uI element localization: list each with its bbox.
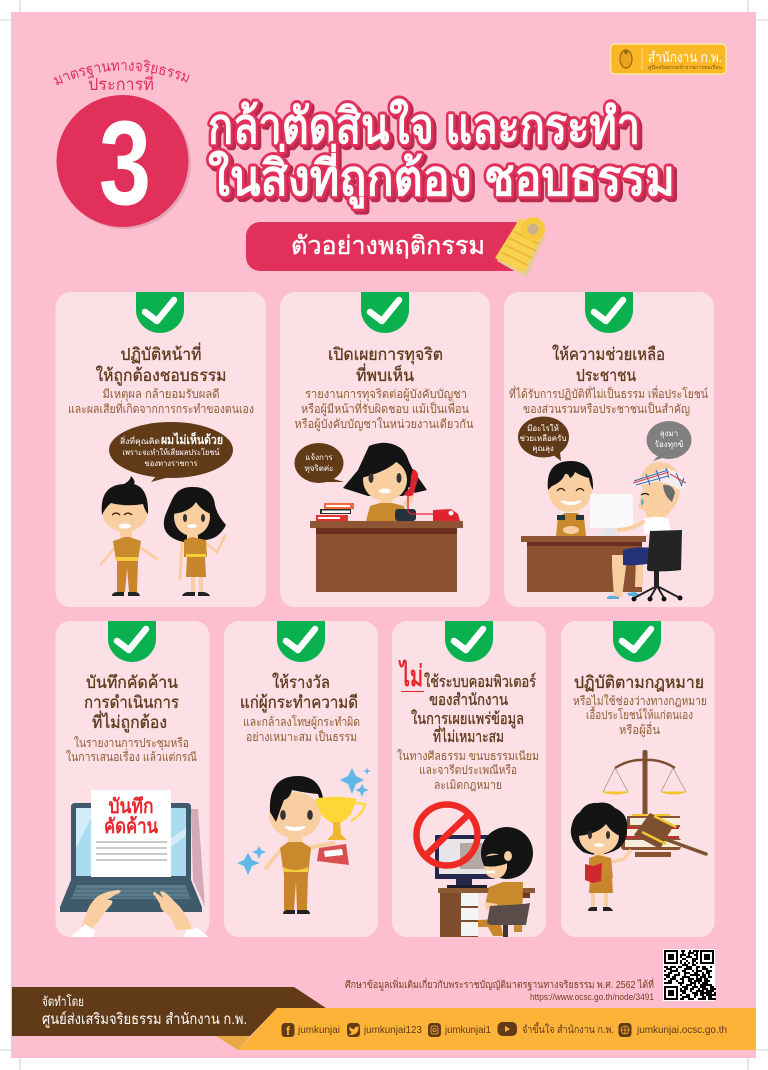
title: ในสิ่งที่ถูกต้อง ชอบธรรม	[211, 146, 678, 212]
icon: prohibition sign	[416, 804, 478, 866]
icon: check shield	[585, 292, 633, 333]
description: หรือผู้มีหน้าที่รับผิดชอบ แม้เป็นเพื่อน	[301, 400, 469, 417]
illustration: officer helping citizen at desk	[521, 461, 688, 602]
speech bubble	[109, 422, 233, 482]
description	[573, 694, 707, 738]
description: ในทางศีลธรรม ขนบธรรมเนียม	[397, 749, 539, 763]
speech bubble: เพราะจะทำให้เสียผลประโยชน์	[122, 447, 220, 457]
description: ของส่วนรวมหรือประชาชนเป็นสำคัญ	[523, 401, 690, 416]
illustration: laptop with memo: บันทึก	[108, 796, 154, 818]
panel: perform duties	[56, 292, 266, 607]
icon: check shield	[108, 621, 156, 662]
heading: ในการเผยแพร่ข้อมูล	[411, 709, 524, 729]
description: หรือผู้บังคับบัญชาในหน่วยงานเดียวกัน	[294, 417, 474, 432]
subtitle pill: ตัวอย่างพฤติกรรม	[291, 232, 485, 260]
description	[509, 385, 708, 416]
description: ในรายงานการประชุมหรือ	[74, 736, 189, 751]
illustration: books and gavel	[621, 813, 706, 857]
heading: ให้ความช่วยเหลือ	[552, 344, 665, 364]
icon: sparkles	[237, 768, 371, 875]
panel: disclose corruption	[280, 292, 490, 607]
speech bubble: ผมไม่เห็นด้วย	[161, 432, 223, 447]
heading: ให้ถูกต้องชอบธรรม	[96, 365, 226, 386]
number circle	[56, 95, 191, 230]
curved label: standard number: มาตรฐานทางจริยธรรม	[54, 60, 190, 86]
speech bubble: ของทางราชการ	[144, 459, 198, 468]
panel: follow the law	[561, 621, 714, 937]
heading	[240, 672, 358, 713]
number circle: 3	[99, 96, 151, 230]
heading: เปิดเผยการทุจริต	[328, 345, 443, 365]
heading	[398, 659, 536, 746]
hands	[71, 890, 209, 937]
description: หรือไม่ใช้ช่องว่างทางกฎหมาย	[573, 694, 707, 708]
footer: organiser banner	[12, 987, 326, 1050]
illustration: man officer	[101, 476, 157, 596]
description	[66, 736, 197, 764]
QR code	[663, 949, 716, 1001]
heading: บันทึกคัดค้าน	[86, 673, 178, 692]
icon: twitter	[347, 1023, 360, 1037]
description: มีเหตุผล กล้ายอมรับผลดี	[102, 387, 220, 402]
footer: social links bar: jumkunjai	[297, 1024, 340, 1036]
illustration: woman at desk with phone	[310, 443, 463, 592]
illustration: laptop with memo	[60, 790, 209, 937]
description: เอื้อประโยชน์ให้แก่ตนเอง	[586, 706, 693, 722]
description: และกล้าลงโทษผู้กระทำผิด	[243, 715, 360, 730]
speech bubble: สิ่งที่คุณคิด	[120, 435, 160, 446]
title: ในสิ่งที่ถูกต้อง ชอบธรรม	[208, 143, 675, 209]
icon: youtube	[498, 1022, 517, 1036]
footer: organiser banner: ศูนย์ส่งเสริมจริยธรรม สำนักงาน ก.พ.	[42, 1011, 247, 1028]
panel: reward good deeds	[224, 621, 378, 937]
speech bubble: citizen: ลุงมา	[660, 429, 678, 438]
heading	[84, 673, 179, 733]
heading	[328, 345, 443, 385]
speech bubble: officer: ช่วยเหลือครับ	[519, 434, 567, 443]
icon: name tag	[495, 217, 546, 278]
footer: social links bar	[238, 1008, 756, 1050]
panel: no computer misuse	[392, 621, 546, 937]
heading: การดำเนินการ	[84, 693, 179, 712]
description	[294, 387, 474, 432]
logo: office badge	[610, 44, 726, 74]
footer: social links bar: jumkunjai123	[363, 1024, 422, 1036]
heading: ไม่	[398, 659, 423, 693]
illustration: officer holding trophy	[266, 776, 365, 914]
heading: แก่ผู้กระทำความดี	[240, 693, 358, 713]
heading	[96, 342, 226, 386]
description	[243, 715, 360, 744]
logo: office badge: สำนักงาน ก.พ.	[648, 49, 722, 65]
speech bubble: แจ้งการ	[305, 453, 333, 462]
icon: check shield	[613, 621, 661, 662]
title: กล้าตัดสินใจ และกระทำ	[211, 101, 643, 157]
footer: social links bar: jumkunjai1	[444, 1024, 491, 1036]
description: และจารีตประเพณีหรือ	[419, 763, 517, 777]
more information text: https://www.ocsc.go.th/node/3491	[530, 992, 654, 1002]
description: รายงานการทุจริตต่อผู้บังคับบัญชา	[305, 387, 467, 402]
heading	[552, 344, 665, 385]
illustration: woman officer	[164, 487, 226, 596]
speech bubble	[294, 443, 344, 483]
speech bubble: citizen	[646, 421, 692, 461]
icon: check shield	[136, 292, 184, 333]
icon: instagram	[428, 1023, 441, 1037]
logo: office badge: คู่มือจริยธรรมข้าราชการพลเรือน	[648, 64, 723, 71]
subtitle pill	[246, 222, 528, 271]
speech bubble: ทุจริตค่ะ	[304, 464, 334, 473]
title: กล้าตัดสินใจ และกระทำ	[208, 98, 640, 154]
speech bubble: citizen: ร้องทุกข์	[655, 439, 683, 449]
description: ละเมิดกฎหมาย	[434, 778, 502, 792]
footer: organiser banner: จัดทำโดย	[42, 994, 84, 1009]
speech bubble: officer: คุณลุง	[532, 444, 554, 453]
more information text	[345, 977, 654, 1002]
heading: ที่ไม่ถูกต้อง	[92, 710, 167, 733]
icon: facebook: f	[286, 1024, 291, 1038]
heading: ใช้ระบบคอมพิวเตอร์	[424, 672, 536, 691]
illustration: scales of justice	[603, 750, 686, 817]
heading: ของสำนักงาน	[429, 692, 508, 709]
title	[208, 98, 678, 212]
heading: ปฏิบัติตามกฎหมาย	[574, 673, 704, 692]
description: และผลเสียที่เกิดจากการกระทำของตนเอง	[68, 400, 254, 416]
description: ที่ได้รับการปฏิบัติที่ไม่เป็นธรรม เพื่อประโยชน์	[509, 385, 708, 401]
curved label: standard number: ประการที่	[88, 72, 154, 94]
description	[397, 749, 539, 792]
description: หรือผู้อื่น	[619, 721, 660, 738]
heading: ให้รางวัล	[272, 672, 330, 692]
icon: check shield	[361, 292, 409, 333]
speech bubble: officer	[518, 416, 569, 461]
panel: help citizens	[504, 292, 714, 607]
illustration: laptop with memo: คัดค้าน	[104, 815, 158, 838]
description: อย่างเหมาะสม เป็นธรรม	[246, 729, 357, 744]
more information text: ศึกษาข้อมูลเพิ่มเติมเกี่ยวกับพระราชบัญญัติมาตรฐานทางจริยธรรม พ.ศ. 2562 ได้ที่	[345, 977, 654, 991]
footer: social links bar: jumkunjai.ocsc.go.th	[636, 1024, 727, 1036]
illustration: person at computer	[435, 827, 535, 937]
description: ในการเสนอเรื่อง แล้วแต่กรณี	[66, 748, 197, 764]
heading: ปฏิบัติหน้าที่	[120, 342, 202, 364]
footer: social links bar: จำขึ้นใจ สำนักงาน ก.พ.	[522, 1022, 614, 1036]
icon: facebook	[282, 1023, 294, 1038]
icon: check shield	[277, 621, 325, 662]
heading: ที่ไม่เหมาะสม	[433, 725, 504, 746]
description	[68, 387, 254, 416]
heading: ที่พบเห็น	[356, 363, 414, 385]
icon: check shield	[445, 621, 493, 662]
icon: website globe	[618, 1023, 632, 1037]
speech bubble: officer: มีอะไรให้	[527, 424, 559, 433]
illustration: woman with book	[571, 803, 630, 911]
heading: ประชาชน	[576, 366, 636, 385]
panel: record objection	[56, 621, 210, 937]
